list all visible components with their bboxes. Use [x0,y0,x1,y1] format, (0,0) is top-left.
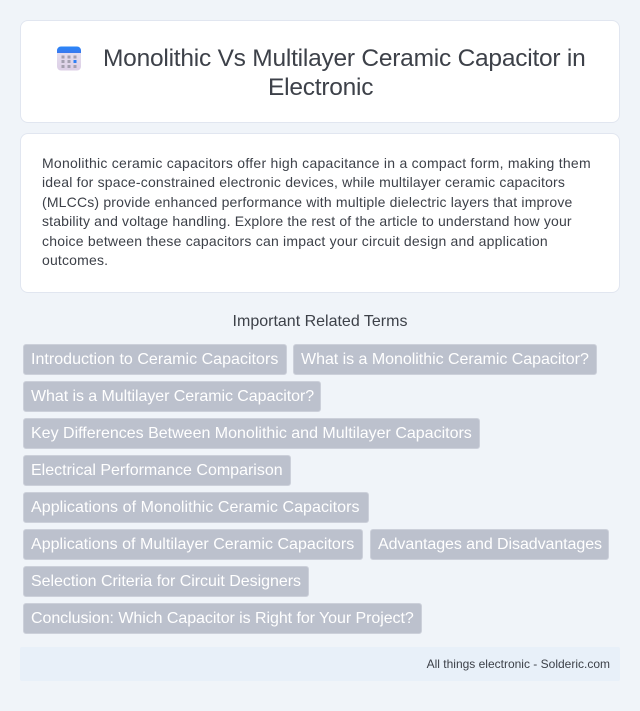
text block: description: ideal for space-constrained electronic devices, while multilayer ceramic capacitors [42,174,565,190]
tag: What is a Monolithic Ceramic Capacitor? [301,351,589,368]
tag list [23,344,609,634]
tag [23,603,422,634]
tag: Selection Criteria for Circuit Designers [31,573,301,590]
icon: calendar [57,46,81,70]
tag: Applications of Multilayer Ceramic Capacitors [31,536,354,553]
title [103,45,586,101]
panel: header [20,20,620,123]
tag [23,344,287,375]
tag [370,529,609,560]
title: Electronic [268,74,373,101]
tag: What is a Multilayer Ceramic Capacitor? [31,388,314,405]
text block: description: Monolithic ceramic capacitors offer high capacitance in a compact form, making them [42,155,591,171]
tag: Applications of Monolithic Ceramic Capacitors [31,499,360,516]
tag [293,344,597,375]
text block: description: stability and voltage handling. Explore the rest of the article to understand how your [42,213,572,229]
tag [23,529,363,560]
tag: Introduction to Ceramic Capacitors [31,351,278,368]
text block: description: (MLCCs) provide enhanced performance with multiple dielectric layers that improve [42,194,572,210]
panel: description [20,133,620,293]
tag [23,566,309,597]
tag [23,418,480,449]
heading: related terms: Important Related Terms [233,313,407,330]
tag: Key Differences Between Monolithic and Multilayer Capacitors [31,425,472,442]
footer [20,647,620,681]
tag [23,455,291,486]
footer: All things electronic - Solderic.com [427,657,610,671]
title: Monolithic Vs Multilayer Ceramic Capacitor in [103,45,586,72]
tag: Conclusion: Which Capacitor is Right for Your Project? [31,610,414,627]
text block: description: outcomes. [42,252,108,268]
text block: description [42,155,591,268]
text block: description: choice between these capacitors can impact your circuit design and application [42,233,548,249]
tag [23,381,321,412]
tag: Advantages and Disadvantages [378,536,602,553]
tag [23,492,369,523]
tag: Electrical Performance Comparison [31,462,283,479]
